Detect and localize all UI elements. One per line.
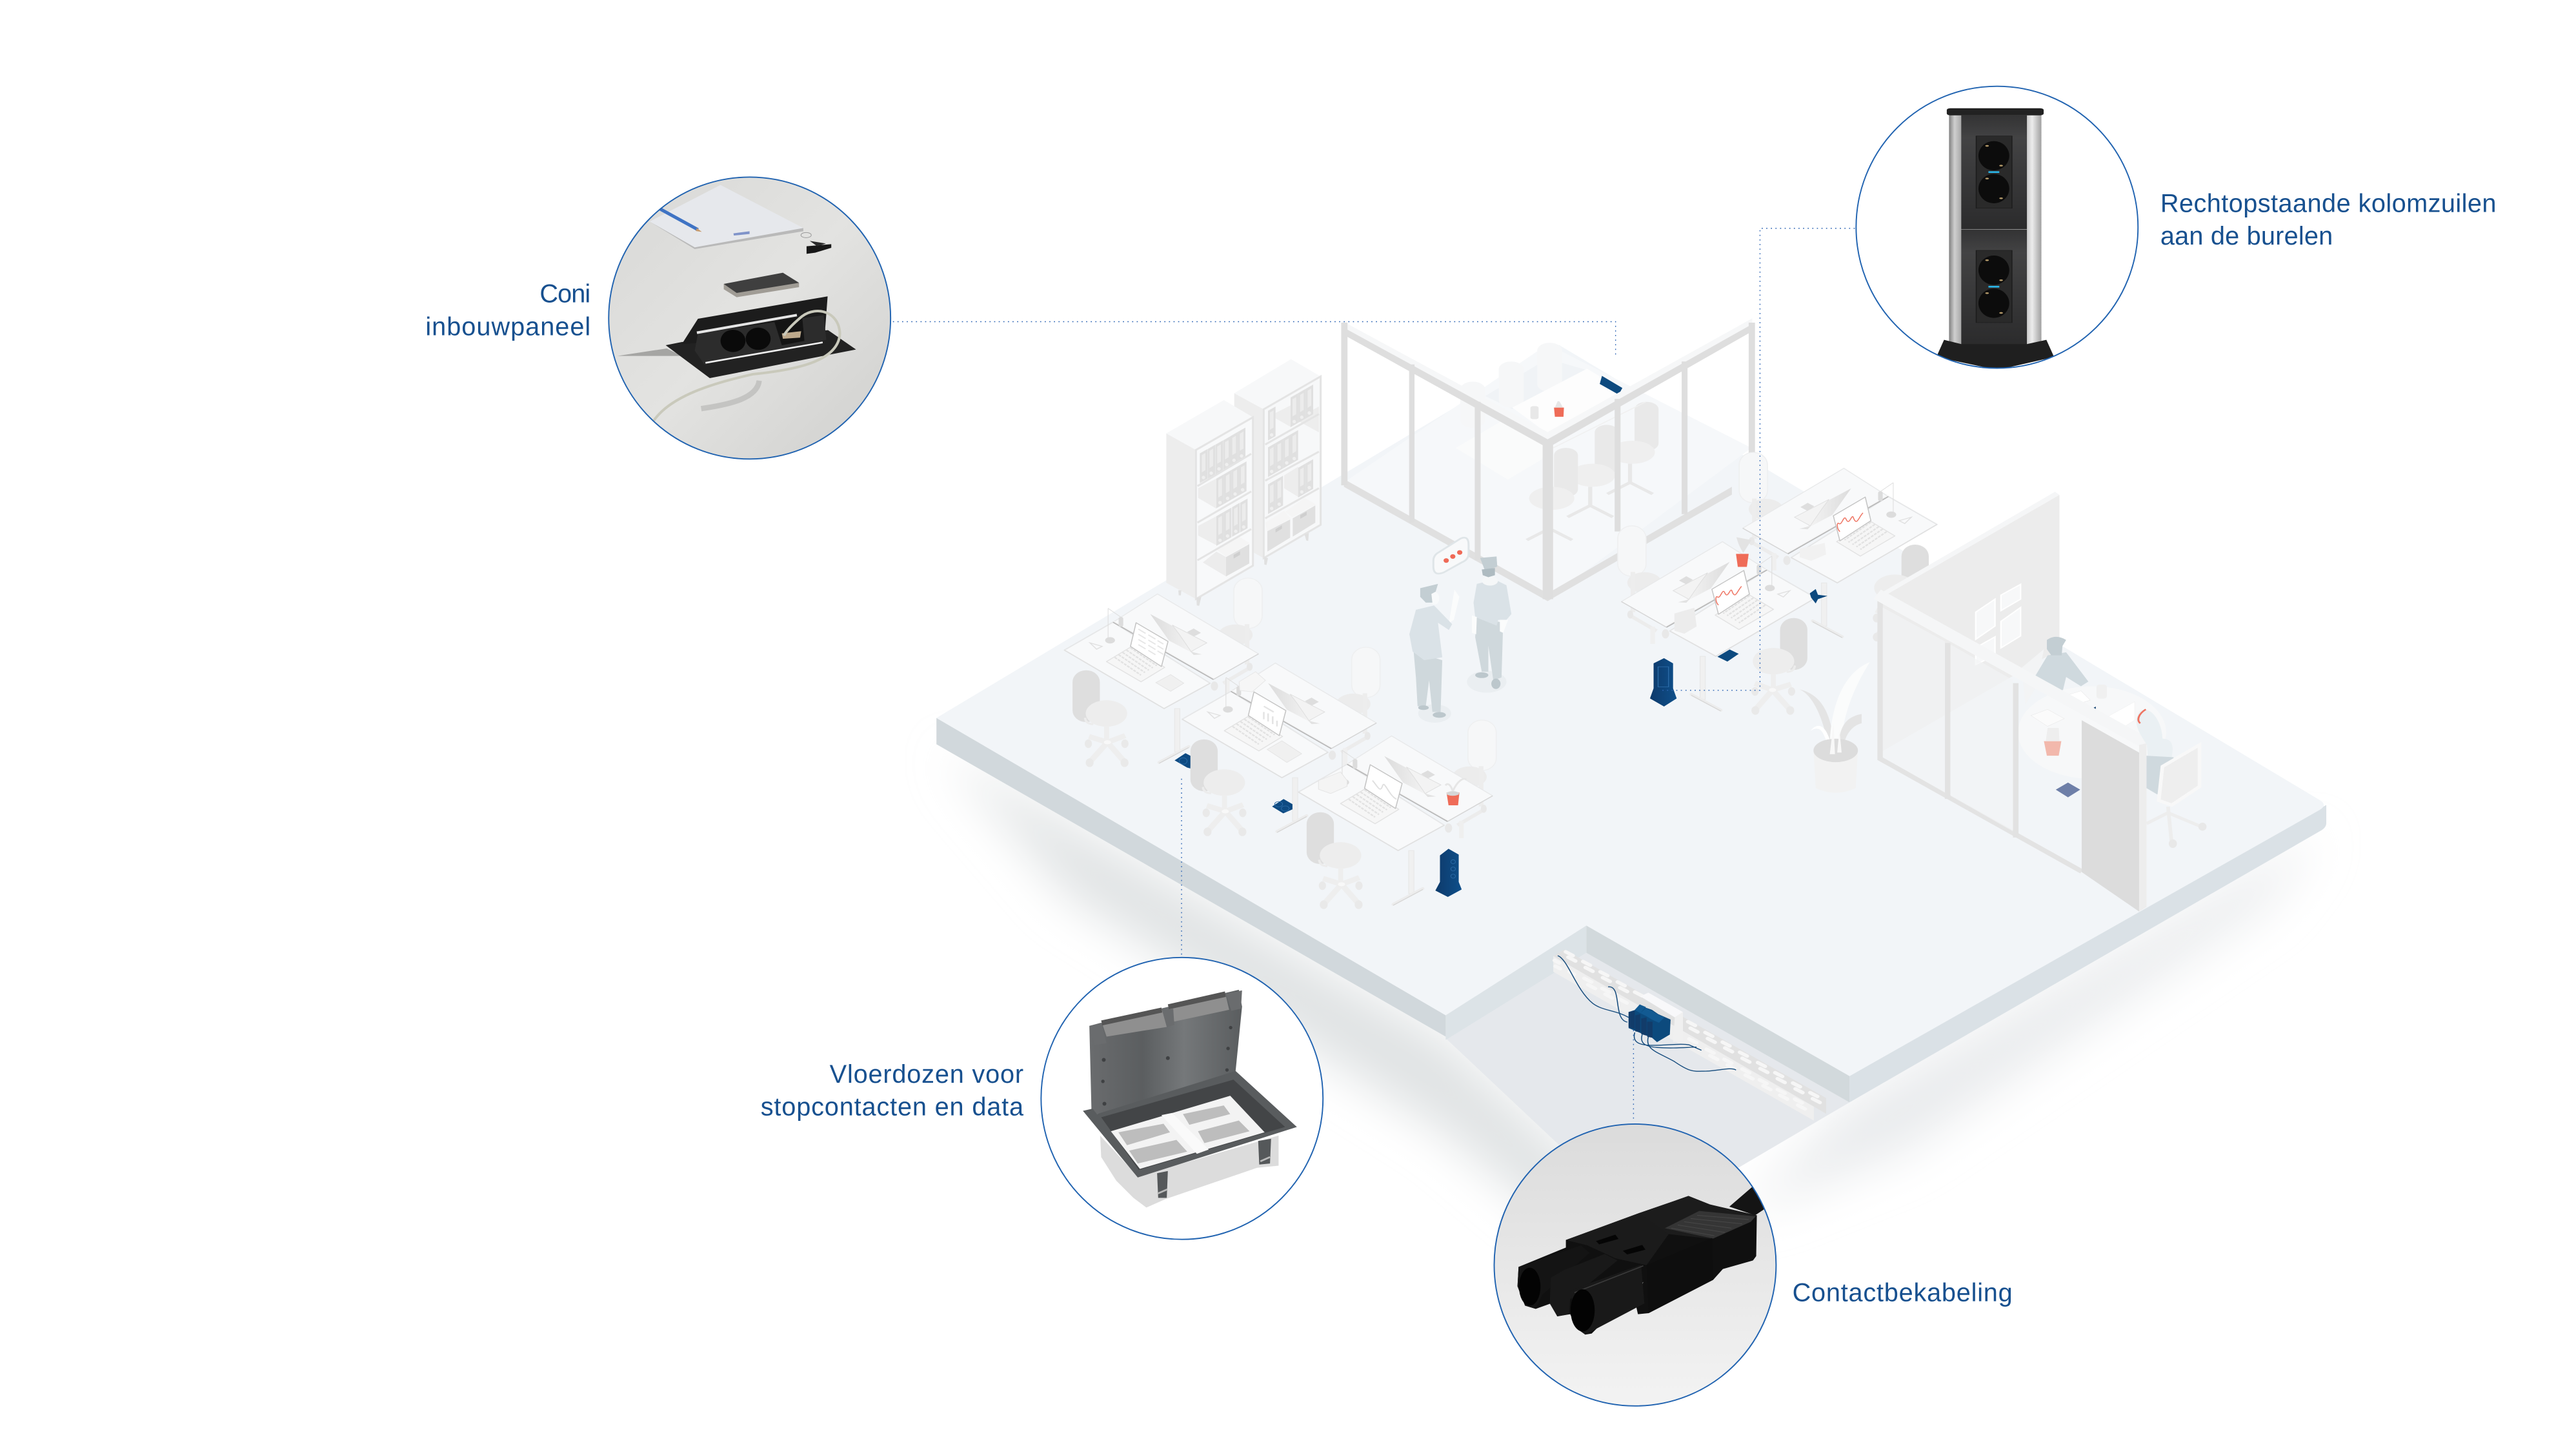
sunken floor and cable channel (1445, 925, 1849, 1224)
potted plant (1800, 662, 1870, 792)
label: Vloerdozen: Vloerdozen voor (830, 1060, 1023, 1089)
icon: floor box one (1174, 753, 1191, 769)
photo circle: Coni inbouwpaneel (609, 177, 891, 459)
leader line: kolomzuilen (1661, 228, 1855, 690)
floor shadows (945, 752, 2320, 1298)
solid end wall (2082, 720, 2139, 912)
photo circle: vloerdozen (1041, 958, 1323, 1240)
private office with wall (1800, 492, 2206, 912)
label: Coni inbouwpaneel: inbouwpaneel (425, 312, 590, 341)
desk group: row two (1182, 647, 1380, 836)
icon: faded floor box (2056, 783, 2080, 798)
round table (2018, 686, 2166, 779)
cable tray and connector block (1553, 950, 1826, 1121)
office chair (2146, 745, 2206, 848)
icon: floor box two (1272, 799, 1293, 814)
room furniture (1344, 343, 1751, 599)
glass meeting room (1341, 318, 1755, 601)
desk group: row one (1064, 578, 1262, 767)
back wall (1883, 495, 2060, 751)
label: Contactbekabeling: Contactbekabeling (1793, 1278, 2013, 1307)
icon: blue marker (2091, 707, 2096, 713)
seated man (2022, 637, 2088, 705)
label: Coni inbouwpaneel (425, 279, 590, 341)
desk group: row three (1298, 720, 1496, 909)
icon: blue desk panel (1600, 376, 1622, 395)
label: Rechtopstaande kolomzuilen: Rechtopstaande kolomzuilen (2160, 189, 2497, 217)
binders (1675, 608, 1696, 634)
leader line: contactbekabeling (1633, 1030, 1634, 1120)
red pot on desk (1445, 779, 1466, 805)
desk group: rear right (1739, 452, 1937, 641)
glass frame (1877, 594, 2146, 871)
bookshelves (1166, 359, 1321, 606)
shelf left (1166, 400, 1253, 606)
label: Vloerdozen: stopcontacten en data (761, 1093, 1024, 1121)
items on right desks (1650, 537, 1827, 707)
shelf right (1234, 359, 1321, 565)
desk group: front right (1618, 526, 1816, 715)
person two (1467, 556, 1511, 693)
seated woman (2137, 709, 2173, 794)
icon: tower socket (1650, 658, 1676, 707)
red plant pot (1736, 537, 1751, 567)
floor slab (936, 345, 2326, 1102)
right desk rows (1618, 452, 1937, 715)
table items (2031, 685, 2135, 756)
leader line: vloerdozen (1181, 779, 1182, 957)
speech bubble (1433, 538, 1469, 574)
posters (1976, 585, 2020, 665)
floor boxes (1717, 589, 1827, 661)
left desk rows (1064, 538, 1511, 909)
photo circle: kolomzuilen (1856, 86, 2138, 370)
photo circle: contactbekabeling (1494, 1124, 1776, 1406)
label: Coni inbouwpaneel: Coni (539, 279, 590, 308)
label: Rechtopstaande kolomzuilen (2160, 189, 2497, 250)
glass frame (1341, 318, 1755, 601)
person one (1409, 584, 1460, 723)
leader line: Coni inbouwpaneel (893, 321, 1616, 356)
label: Rechtopstaande kolomzuilen: aan de burelen (2160, 222, 2333, 250)
wall top (1877, 492, 2060, 595)
end post (2139, 743, 2146, 912)
label: Vloerdozen (761, 1060, 1024, 1121)
icon: tower socket (1435, 849, 1462, 897)
stack of papers (1800, 543, 1826, 561)
office floor scene (936, 318, 2326, 1298)
